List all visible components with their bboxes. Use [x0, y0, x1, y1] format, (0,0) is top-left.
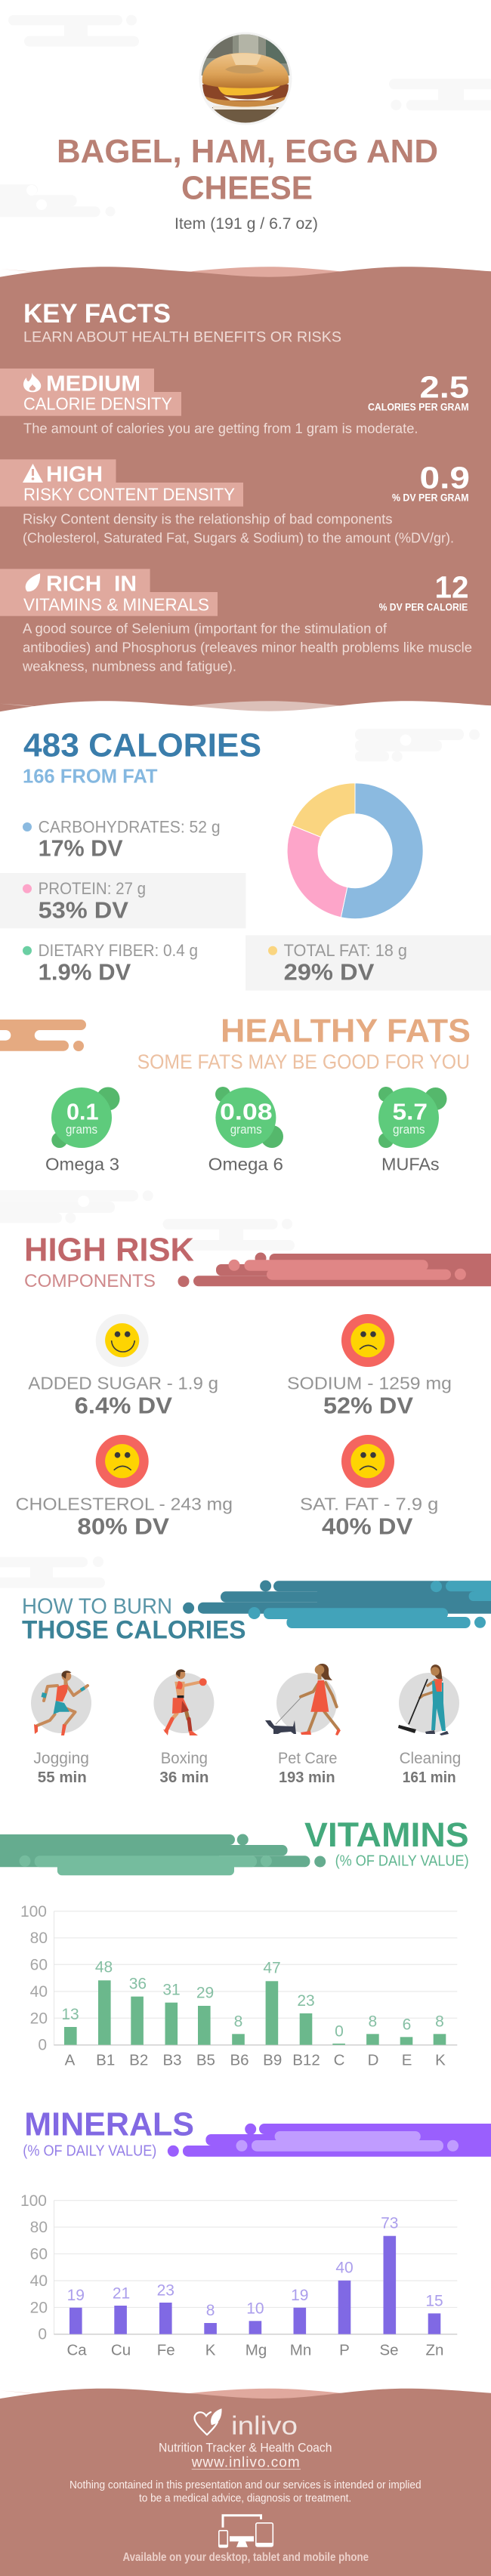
- legend: carbohydrates: 17% DV: [39, 835, 123, 861]
- bar chart: vitamins: K: [435, 2051, 446, 2069]
- bar chart: minerals: 23: [157, 2281, 174, 2299]
- bar chart: vitamins: B3: [162, 2051, 182, 2069]
- activity: pet care: Pet Care: [278, 1750, 337, 1767]
- bar chart: minerals: 21: [113, 2284, 130, 2302]
- heading: minerals: (% OF DAILY VALUE): [23, 2143, 156, 2159]
- bar chart: minerals: 60: [30, 2246, 48, 2263]
- title: [57, 133, 438, 206]
- bar chart: vitamins: 8: [435, 2013, 444, 2030]
- banner: high risk: [178, 1252, 491, 1287]
- stat: omega 6: grams: [230, 1122, 262, 1137]
- bar chart: vitamins: B5: [196, 2051, 215, 2069]
- heading: vitamins: [304, 1816, 469, 1870]
- icon: sad face: [341, 1435, 394, 1488]
- activity: pet care: [265, 1664, 341, 1786]
- heading: calories: [23, 728, 261, 788]
- risk: saturated fat: SAT. FAT - 7.9 g: [300, 1494, 438, 1513]
- bar chart: vitamins: 8: [234, 2013, 242, 2030]
- fact: risky content density: [0, 459, 470, 545]
- fact: vitamins and minerals: RICH IN: [46, 572, 137, 597]
- fact: calorie density: MEDIUM: [46, 372, 141, 396]
- icon: flame: [23, 372, 41, 392]
- stat: mufas: MUFAs: [381, 1154, 440, 1174]
- bar chart: vitamins: 13: [61, 2006, 79, 2023]
- bar chart: minerals: Zn: [426, 2341, 443, 2359]
- risk: saturated fat: [300, 1435, 438, 1540]
- heading: minerals: MINERALS: [24, 2106, 194, 2143]
- stat: omega 6: 0.08: [220, 1100, 273, 1125]
- activity: cleaning: 161 min: [403, 1769, 456, 1786]
- fact: risky content density: RISKY CONTENT DENSITY: [23, 485, 235, 504]
- bar chart: minerals: Cu: [111, 2341, 131, 2359]
- heading: key facts: KEY FACTS: [23, 299, 171, 329]
- bar chart: minerals: 0: [38, 2326, 47, 2343]
- logo: inlivo: [194, 2408, 298, 2440]
- stat: omega 3: grams: [66, 1122, 97, 1137]
- icon: runner: [31, 1671, 91, 1735]
- legend: protein: [0, 873, 246, 928]
- bar chart: minerals: 8: [206, 2302, 215, 2319]
- fact: risky content density: % DV PER GRAM: [392, 492, 469, 503]
- banner: minerals: [168, 2124, 491, 2157]
- activity: cleaning: [398, 1664, 461, 1786]
- legend: protein: 53% DV: [39, 898, 129, 924]
- heading: key facts: [23, 299, 341, 346]
- fact: calorie density: 2.5: [420, 370, 469, 405]
- fact: risky content density: Risky Content density is the relationship of bad components: [23, 511, 393, 526]
- heading: high risk: HIGH RISK: [24, 1232, 195, 1268]
- disclaimer: to be a medical advice, diagnosis or treatment.: [139, 2491, 351, 2504]
- fact: calorie density: [0, 369, 469, 436]
- legend: dietary fiber: [23, 941, 198, 986]
- bar chart: vitamins: 29: [196, 1985, 214, 2002]
- bar chart: vitamins: B1: [96, 2051, 115, 2069]
- bar chart: vitamins: 48: [95, 1959, 113, 1976]
- heading: healthy fats: SOME FATS MAY BE GOOD FOR YOU: [137, 1050, 470, 1073]
- bar chart: minerals: Mg: [246, 2341, 267, 2359]
- heading: burn calories: THOSE CALORIES: [22, 1615, 246, 1644]
- food photo: [196, 30, 295, 126]
- activity: jogging: [31, 1671, 91, 1786]
- bar chart: vitamins: E: [402, 2051, 412, 2069]
- fact: calorie density: CALORIE DENSITY: [23, 394, 172, 414]
- icon: happy face: [96, 1314, 149, 1367]
- risk: added sugar: [28, 1314, 218, 1419]
- bar chart: vitamins: B12: [292, 2051, 320, 2069]
- disclaimer: Nothing contained in this presentation and our services is intended or implied: [69, 2479, 422, 2491]
- bar chart: vitamins: C: [334, 2051, 345, 2069]
- legend: total fat: 29% DV: [284, 960, 375, 986]
- risk: cholesterol: [16, 1435, 233, 1540]
- fact: calorie density: The amount of calories you are getting from 1 gram is moderate.: [23, 421, 418, 436]
- activity: jogging: Jogging: [33, 1750, 89, 1767]
- icon: woman walking dog: [265, 1664, 341, 1735]
- icon: leaf: [26, 573, 40, 591]
- heading: burn calories: HOW TO BURN: [22, 1595, 172, 1619]
- risk: cholesterol: CHOLESTEROL - 243 mg: [16, 1494, 233, 1513]
- panel: footer: [0, 2389, 491, 2576]
- fact: risky content density: (Cholesterol, Saturated Fat, Sugars & Sodium) to the amount (%DV/gr).: [23, 530, 454, 545]
- heading: high risk: [24, 1232, 195, 1291]
- icon: boxer: [153, 1669, 214, 1735]
- heading: healthy fats: HEALTHY FATS: [221, 1013, 471, 1049]
- fact: vitamins and minerals: VITAMINS & MINERALS: [23, 594, 209, 614]
- risk: added sugar: 6.4% DV: [75, 1393, 173, 1419]
- bar chart: minerals: 73: [381, 2215, 398, 2232]
- bar chart: minerals: 19: [291, 2287, 308, 2304]
- stat: mufas: [378, 1087, 447, 1174]
- legend: total fat: TOTAL FAT: 18 g: [284, 941, 407, 960]
- stat: omega 6: Omega 6: [208, 1154, 283, 1174]
- fact: risky content density: 0.9: [420, 461, 470, 495]
- bar chart: vitamins: A: [65, 2051, 76, 2069]
- bar chart: vitamins: 20: [30, 2010, 48, 2027]
- risk: sodium: [287, 1314, 452, 1419]
- fact: calorie density: CALORIES PER GRAM: [368, 401, 469, 412]
- bar chart: vitamins: B9: [263, 2051, 282, 2069]
- heading: healthy fats: [137, 1013, 471, 1073]
- fact: vitamins and minerals: [0, 569, 472, 674]
- legend: dietary fiber: 1.9% DV: [39, 960, 131, 986]
- bar chart: minerals: 20: [30, 2299, 48, 2317]
- background cloud: calories: [355, 729, 480, 762]
- legend: dietary fiber: DIETARY FIBER: 0.4 g: [39, 941, 198, 960]
- bar chart: minerals: P: [339, 2341, 350, 2359]
- bar chart: minerals: Ca: [66, 2341, 87, 2359]
- icon: person sweeping: [398, 1664, 459, 1735]
- banner: burn calories: [183, 1580, 491, 1628]
- activity: boxing: Boxing: [161, 1750, 208, 1767]
- icon: devices: [219, 2516, 273, 2547]
- fact: vitamins and minerals: 12: [435, 570, 468, 605]
- bar chart: vitamins: 0: [335, 2023, 344, 2041]
- fact: vitamins and minerals: weakness, numbness and fatigue).: [22, 659, 236, 674]
- bar chart: vitamins: 6: [403, 2016, 411, 2033]
- activity: pet care: 193 min: [279, 1769, 335, 1786]
- activity: cleaning: Cleaning: [400, 1750, 461, 1767]
- icon: sad face: [341, 1314, 394, 1367]
- bar chart: vitamins: B6: [230, 2051, 249, 2069]
- background clouds: high risk: [0, 1190, 295, 1251]
- legend: carbohydrates: [23, 818, 221, 861]
- bar chart: minerals: Se: [379, 2341, 399, 2359]
- bar chart: minerals: Mn: [290, 2341, 311, 2359]
- bar chart: minerals: 80: [30, 2219, 48, 2236]
- heading: vitamins: (% OF DAILY VALUE): [335, 1853, 469, 1870]
- disclaimer: [69, 2479, 422, 2504]
- bar chart: vitamins: 60: [30, 1956, 48, 1974]
- legend: carbohydrates: CARBOHYDRATES: 52 g: [39, 818, 221, 837]
- banner: healthy fats: [0, 1020, 86, 1051]
- title: CHEESE: [181, 169, 313, 206]
- fact: vitamins and minerals: A good source of Selenium (important for the stimulation of: [23, 621, 388, 636]
- stat: omega 3: [45, 1087, 119, 1174]
- bar chart: vitamins: 23: [297, 1992, 315, 2010]
- risk: sodium: 52% DV: [323, 1393, 414, 1419]
- activity: boxing: 36 min: [159, 1769, 208, 1786]
- serving size: Item (191 g / 6.7 oz): [174, 215, 318, 233]
- bar chart: vitamins: [20, 1903, 457, 2069]
- availability note: Available on your desktop, tablet and mobile phone: [122, 2551, 369, 2564]
- bar chart: vitamins: 36: [129, 1975, 147, 1992]
- heading: vitamins: VITAMINS: [304, 1816, 469, 1854]
- stat: omega 6: [208, 1087, 283, 1174]
- risk: saturated fat: 40% DV: [322, 1514, 413, 1540]
- legend: protein: PROTEIN: 27 g: [39, 879, 146, 898]
- tagline: Nutrition Tracker & Health Coach: [159, 2441, 332, 2455]
- background cloud: left: [0, 184, 115, 217]
- bar chart: minerals: Fe: [157, 2341, 175, 2359]
- bar chart: minerals: K: [205, 2341, 216, 2359]
- activity: jogging: 55 min: [38, 1769, 87, 1786]
- heading: calories: 166 FROM FAT: [23, 767, 158, 788]
- risk: added sugar: ADDED SUGAR - 1.9 g: [28, 1373, 218, 1393]
- bar chart: vitamins: D: [368, 2051, 378, 2069]
- logo: inlivo: inlivo: [231, 2411, 298, 2440]
- fact: vitamins and minerals: antibodies) and Phosphorus (releaves minor health problems like muscle: [23, 640, 472, 655]
- background cloud: burn calories: [0, 1556, 105, 1588]
- fact: risky content density: HIGH: [46, 462, 103, 486]
- bar chart: minerals: 40: [30, 2272, 48, 2290]
- icon: sad face: [96, 1435, 149, 1488]
- background cloud: right: [389, 79, 491, 110]
- risk: cholesterol: 80% DV: [77, 1514, 170, 1540]
- risk: sodium: SODIUM - 1259 mg: [287, 1373, 452, 1393]
- bar chart: minerals: 40: [335, 2260, 354, 2277]
- panel: key facts: [0, 267, 491, 746]
- heading: burn calories: [22, 1595, 246, 1644]
- bar chart: minerals: 100: [20, 2192, 47, 2210]
- title: BAGEL, HAM, EGG AND: [57, 133, 438, 170]
- fact: vitamins and minerals: % DV PER CALORIE: [379, 601, 468, 612]
- stat: mufas: 5.7: [393, 1100, 428, 1125]
- bar chart: vitamins: 31: [162, 1982, 181, 1999]
- bar chart: vitamins: 47: [263, 1960, 281, 1977]
- bar chart: vitamins: 40: [30, 1983, 48, 2001]
- heading: minerals: [23, 2106, 194, 2159]
- heading: key facts: LEARN ABOUT HEALTH BENEFITS OR RISKS: [23, 329, 341, 346]
- legend: total fat: [246, 935, 491, 991]
- bar chart: vitamins: 8: [369, 2013, 377, 2030]
- bar chart: vitamins: 80: [30, 1930, 48, 1947]
- stat: omega 3: Omega 3: [45, 1154, 119, 1174]
- donut chart: macronutrients: [287, 783, 423, 919]
- bar chart: vitamins: 0: [38, 2036, 47, 2054]
- bar chart: vitamins: B2: [129, 2051, 148, 2069]
- heading: calories: 483 CALORIES: [23, 728, 261, 764]
- bar chart: minerals: 19: [67, 2287, 85, 2304]
- bar chart: minerals: 10: [246, 2300, 264, 2317]
- bar chart: minerals: [20, 2192, 457, 2359]
- website link: www.inlivo.com: [191, 2455, 300, 2471]
- bar chart: vitamins: 100: [20, 1903, 47, 1920]
- stat: omega 3: 0.1: [66, 1100, 99, 1125]
- heading: high risk: COMPONENTS: [24, 1271, 156, 1291]
- banner: vitamins: [0, 1834, 326, 1875]
- icon: warning triangle: [23, 464, 43, 483]
- activity: boxing: [153, 1669, 214, 1786]
- background cloud: top left: [8, 15, 139, 47]
- bar chart: minerals: 15: [425, 2292, 443, 2309]
- stat: mufas: grams: [393, 1122, 425, 1137]
